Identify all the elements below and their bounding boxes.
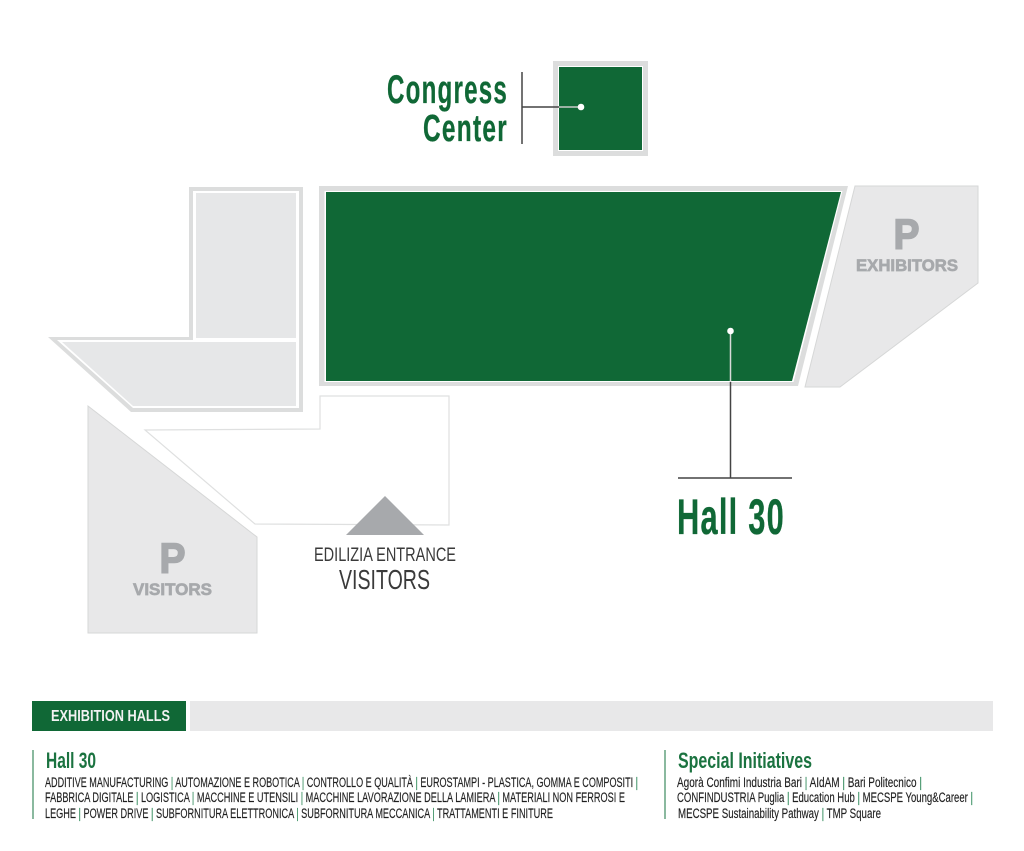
congress center title: Congress <box>387 68 508 112</box>
special initiatives heading: Special Initiatives <box>678 748 812 773</box>
exhibition halls heading: EXHIBITION HALLS <box>51 708 170 725</box>
hall 30 sectors <box>45 775 638 821</box>
hall 30 sectors: LEGHE | POWER DRIVE | SUBFORNITURA ELETTRONICA | SUBFORNITURA MECCANICA | TRATTAMENTI E FINITURE <box>45 806 553 821</box>
special initiatives list <box>665 748 973 821</box>
special initiatives items: CONFINDUSTRIA Puglia | Education Hub | MECSPE Young&Career | <box>677 790 973 805</box>
hall 30 list <box>33 748 638 821</box>
hall 30 title: Hall 30 <box>677 489 785 545</box>
parking exhibitors label: EXHIBITORS <box>856 256 958 275</box>
hall 30 leader line <box>678 328 792 478</box>
parking visitors letter: P <box>160 535 186 583</box>
congress center title <box>387 68 508 150</box>
special initiatives items <box>677 775 973 821</box>
hall 30 sectors: ADDITIVE MANUFACTURING | AUTOMAZIONE E ROBOTICA | CONTROLLO E QUALITÀ | EUROSTAMPI - PLASTICA, GOMMA E COMPOSITI | <box>45 775 638 790</box>
parking visitors <box>88 406 257 633</box>
special initiatives items: MECSPE Sustainability Pathway | TMP Square <box>678 806 881 821</box>
grey unlabelled hall <box>48 187 303 412</box>
parking exhibitors <box>805 186 978 387</box>
congress center building <box>553 61 648 156</box>
parking exhibitors letter: P <box>894 211 920 259</box>
congress center group <box>387 61 648 156</box>
congress center title: Center <box>423 108 508 150</box>
exhibition halls header bar <box>32 701 993 731</box>
special initiatives items: Agorà Confimi Industria Bari | AIdAM | Bari Politecnico | <box>677 775 922 790</box>
entrance area outline <box>145 396 449 525</box>
entrance label: EDILIZIA ENTRANCE <box>314 545 456 566</box>
hall 30 list heading: Hall 30 <box>46 748 96 773</box>
hall 30 building <box>319 186 848 386</box>
congress center leader line <box>522 72 584 144</box>
entrance label <box>314 545 456 595</box>
entrance arrow <box>346 496 424 535</box>
hall 30 sectors: FABBRICA DIGITALE | LOGISTICA | MACCHINE E UTENSILI | MACCHINE LAVORAZIONE DELLA LAMIERA | MATERIALI NON FERROSI E <box>45 790 625 805</box>
entrance label: VISITORS <box>339 564 430 595</box>
parking visitors label: VISITORS <box>133 580 212 599</box>
